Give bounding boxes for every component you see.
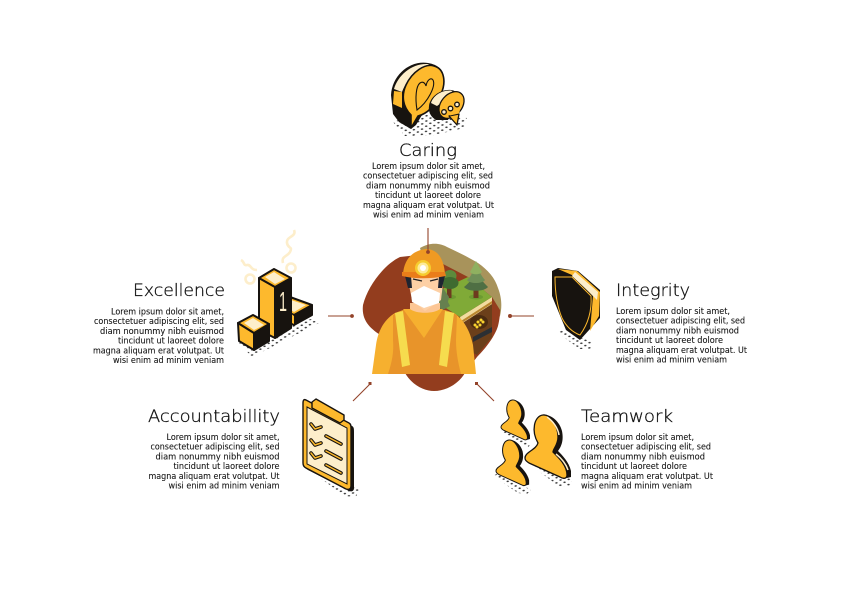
person large (525, 415, 571, 478)
icon: clipboard (302, 399, 359, 497)
text block: Teamwork: Lorem ipsum dolor sit amet, (581, 433, 694, 443)
icon: speech bubbles (391, 63, 469, 136)
terrain block (438, 277, 492, 355)
central illustration: miner and landscape (363, 244, 501, 391)
text block: Caring: diam nonummy nibh euismod (366, 181, 490, 191)
worker body (372, 303, 476, 374)
text block: Excellence: magna aliquam erat volutpat. Ut (93, 346, 225, 356)
text block: Teamwork: wisi enim ad minim veniam (581, 482, 692, 492)
text block: Teamwork: consectetuer adipiscing elit, sed (581, 443, 711, 453)
tan background blob (420, 244, 501, 330)
text block: Integrity: magna aliquam erat volutpat. Ut (616, 346, 748, 356)
connector: right (508, 314, 534, 318)
text block: Teamwork: tincidunt ut laoreet dolore (581, 462, 687, 472)
text block: Teamwork: diam nonummy nibh euismod (581, 452, 705, 462)
text block: Accountabillity: consectetuer adipiscing elit, sed (150, 443, 280, 453)
text block: Accountabillity: Lorem ipsum dolor sit amet, (166, 433, 280, 443)
text block: Excellence: Lorem ipsum dolor sit amet, (111, 308, 224, 318)
text block: Accountabillity: wisi enim ad minim veniam (168, 482, 280, 492)
text block: Integrity: tincidunt ut laoreet dolore (616, 336, 723, 346)
text block: Excellence: Excellence (133, 281, 225, 301)
small pale tree (436, 288, 450, 310)
pine tree (464, 261, 488, 300)
icon: podium (238, 230, 319, 357)
text block: Teamwork: Teamwork (581, 407, 673, 427)
text block: Integrity: wisi enim ad minim veniam (616, 356, 727, 366)
connector: top (426, 228, 430, 254)
worker head and mask (405, 275, 445, 311)
text block: Accountabillity: Accountabillity (148, 407, 280, 427)
text block: Caring: wisi enim ad minim veniam (373, 210, 484, 220)
person top (501, 400, 530, 440)
round tree (442, 270, 458, 300)
text block: Caring: Caring (399, 141, 457, 161)
helmet with lamp (402, 249, 446, 278)
text block: Integrity: consectetuer adipiscing elit, sed (616, 317, 745, 327)
text block: Integrity: Lorem ipsum dolor sit amet, (616, 307, 730, 317)
text block: Teamwork: magna aliquam erat volutpat. Ut (581, 472, 714, 482)
text block: Integrity (616, 281, 748, 366)
text block: Excellence (93, 281, 225, 366)
text block: Caring (363, 141, 495, 220)
text block: Accountabillity: tincidunt ut laoreet dolore (174, 462, 280, 472)
connector: bottom right (475, 382, 494, 401)
text block: Caring: tincidunt ut laoreet dolore (375, 191, 481, 201)
text block: Caring: Lorem ipsum dolor sit amet, (372, 162, 485, 172)
icon: team of people (493, 400, 572, 494)
icon: shield (552, 268, 600, 349)
text block: Accountabillity: diam nonummy nibh euismod (156, 452, 280, 462)
brown background blob (363, 253, 500, 391)
text block: Accountabillity: magna aliquam erat volutpat. Ut (148, 472, 280, 482)
text block: Excellence: wisi enim ad minim veniam (113, 356, 224, 366)
text block: Integrity: Integrity (616, 281, 690, 301)
text block: Excellence: tincidunt ut laoreet dolore (118, 336, 224, 346)
text block: Accountabillity (148, 407, 280, 492)
connector: left (328, 314, 354, 318)
text block: Teamwork (581, 407, 714, 492)
text block: Excellence: consectetuer adipiscing elit, sed (94, 317, 224, 327)
connector: bottom left (353, 382, 372, 401)
numeral 1: 1 (279, 286, 287, 317)
text block: Excellence: diam nonummy nibh euismod (100, 327, 224, 337)
text block: Caring: magna aliquam erat volutpat. Ut (363, 201, 495, 211)
text block: Integrity: diam nonummy nibh euismod (616, 326, 739, 336)
text block: Caring: consectetuer adipiscing elit, sed (363, 172, 493, 182)
person bottom (496, 440, 529, 486)
